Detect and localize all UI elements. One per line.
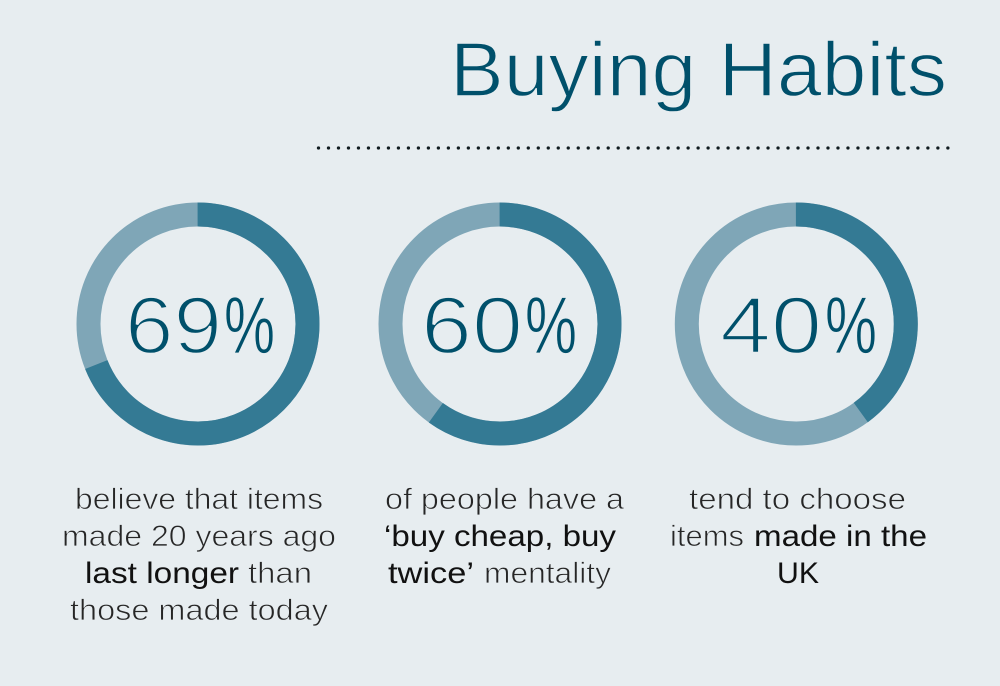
text block: 60% description: of people have a — [385, 483, 624, 516]
text block: 69% description: made 20 years ago — [62, 520, 336, 553]
donut chart: 40% — [687, 214, 906, 434]
text block: 60% description — [384, 483, 624, 590]
text block: 40% description: made in the — [754, 520, 927, 553]
text block: 69% description — [62, 483, 336, 627]
text block: 60% description: twice’ — [388, 557, 474, 590]
figure: 60%: 60 — [421, 281, 523, 371]
text block: 60% description: mentality — [484, 557, 611, 590]
figure: 40%: 40 — [720, 281, 822, 371]
figure: 40% — [720, 281, 877, 371]
figure: 60% — [421, 281, 577, 371]
text block: 60% description: ‘buy cheap, buy — [384, 520, 616, 553]
panel: 40 percent — [670, 214, 927, 590]
figure: 40%: % — [825, 281, 877, 371]
text block: 40% description: UK — [777, 557, 819, 590]
panel: 69 percent — [62, 214, 336, 627]
panel: 60 percent — [384, 214, 624, 590]
text block: 40% description — [670, 483, 927, 590]
text block: 69% description: believe that items — [75, 483, 323, 516]
donut chart: 60% — [390, 214, 610, 434]
donut chart: 69% — [88, 214, 308, 434]
figure: 69%: 69 — [125, 281, 222, 371]
text block: 69% description: those made today — [70, 594, 328, 627]
title: Buying Habits — [450, 27, 947, 113]
text block: 40% description: tend to choose — [689, 483, 906, 516]
figure: 69% — [125, 281, 275, 371]
figure: 69%: % — [224, 281, 275, 371]
figure: 60%: % — [525, 281, 577, 371]
text block: 40% description: items — [670, 520, 744, 553]
text block: 69% description: last longer — [85, 557, 239, 590]
text block: 69% description: than — [248, 557, 312, 590]
